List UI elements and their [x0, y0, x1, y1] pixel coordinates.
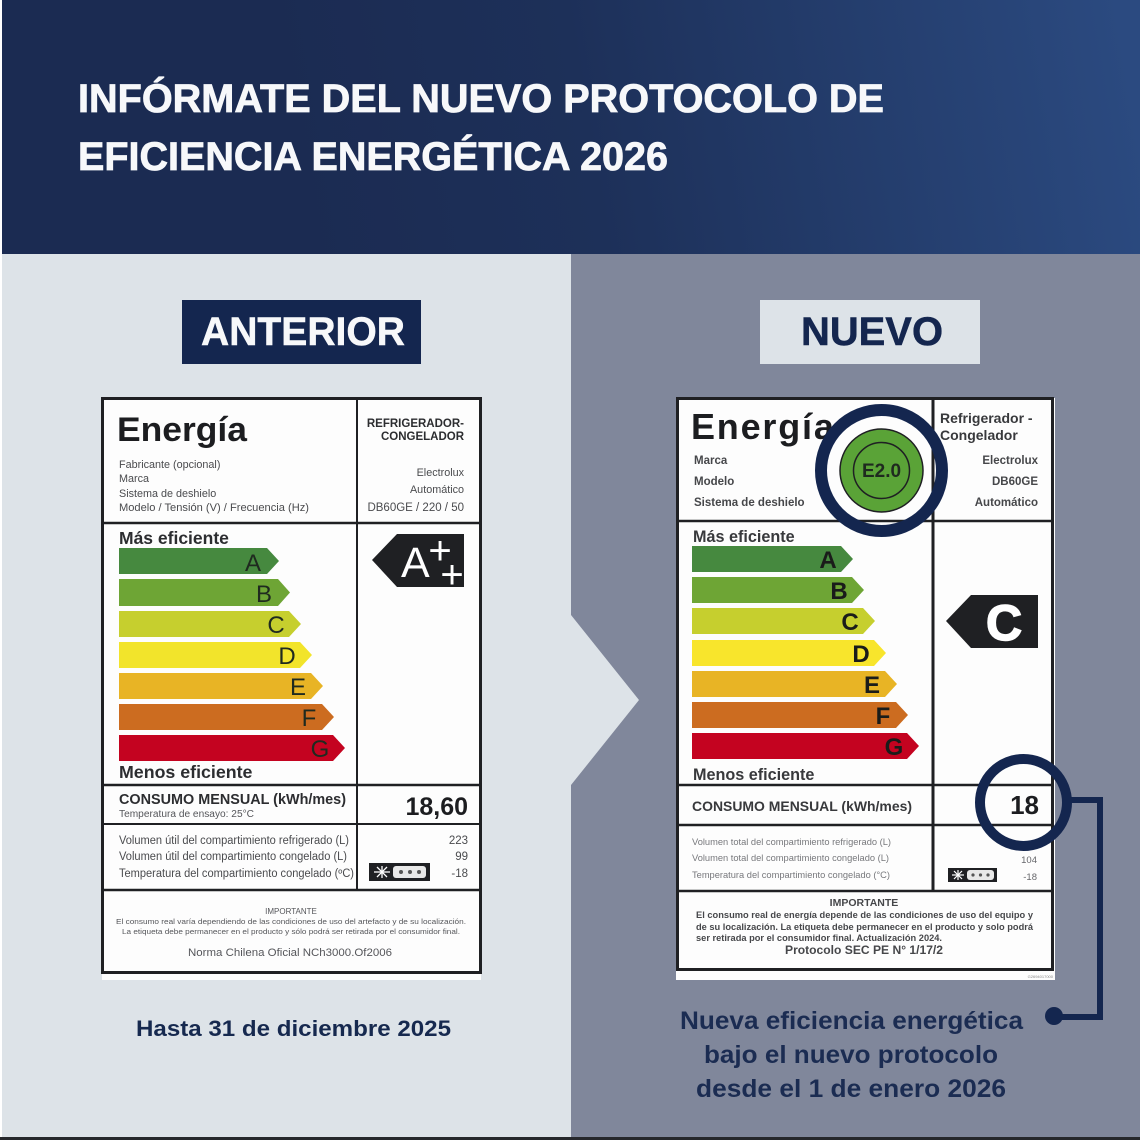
- chart: energy scale nuevo: [692, 546, 919, 761]
- text: volume fields: [119, 835, 354, 880]
- text: volume fields: Volumen total del compartimiento congelado (L): [692, 853, 889, 864]
- text: product values: Electrolux: [417, 467, 465, 479]
- chart: energy scale anterior: B: [256, 581, 272, 608]
- callout: connector line: [1045, 800, 1100, 1025]
- text: volume values: -18: [1023, 872, 1037, 883]
- text: product values: Electrolux: [982, 455, 1039, 467]
- text: importante note: de su localización. La etiqueta debe permanecer en el producto y solo podrá: [696, 922, 1033, 932]
- text: product fields: Marca: [694, 455, 728, 467]
- text: volume fields: Volumen útil del compartimiento congelado (L): [119, 851, 347, 863]
- text: consumo mensual: CONSUMO MENSUAL (kWh/mes): [692, 799, 912, 814]
- panel: nuevo background: [571, 254, 1140, 1137]
- icon: rating A++: [372, 529, 464, 597]
- text: product fields: Modelo / Tensión (V) / Frecuencia (Hz): [119, 502, 309, 514]
- text: volume values: 223: [449, 835, 468, 847]
- text: volume fields: Temperatura del compartimiento congelado (ºC): [119, 868, 354, 880]
- caption: anterior date: Hasta 31 de diciembre 2025: [136, 1016, 451, 1041]
- callout: E2.0 seal: E2.0: [862, 461, 901, 482]
- badge: anterior: [182, 300, 421, 364]
- icon: freezer stars: [369, 863, 430, 881]
- text: product fields: Sistema de deshielo: [694, 497, 805, 509]
- text: product values: DB60GE / 220 / 50: [367, 502, 464, 514]
- header banner: [2, 0, 1140, 254]
- text: product values: Congelador: [940, 427, 1018, 443]
- panel: anterior background: [2, 254, 571, 1137]
- chart: energy scale anterior: F: [302, 705, 316, 732]
- caption: nuevo date: [680, 1007, 1024, 1103]
- text: product values: Automático: [975, 497, 1038, 509]
- icon: rating A++: +: [440, 553, 464, 597]
- icon: freezer stars: [948, 868, 997, 882]
- callout: highlight ring on 18: [980, 759, 1067, 846]
- badge: nuevo: [760, 300, 980, 364]
- badge: anterior: ANTERIOR: [201, 310, 405, 354]
- text: consumo mensual: [119, 792, 346, 820]
- text: importante note: Norma Chilena Oficial NCh3000.Of2006: [188, 947, 392, 959]
- heading: energia: Energía: [691, 406, 836, 447]
- text: mas eficiente: Más eficiente: [693, 528, 795, 546]
- text: product values: [367, 418, 465, 514]
- text: importante note: [116, 907, 466, 959]
- text: label code: G2694017000: [1028, 974, 1054, 979]
- chart: energy scale nuevo: F: [876, 703, 890, 730]
- text: volume values: [449, 835, 468, 880]
- text: volume values: 104: [1021, 855, 1037, 866]
- text: product values: REFRIGERADOR-: [367, 418, 464, 430]
- chart: energy scale nuevo: E: [864, 672, 880, 699]
- panel: etiqueta anterior: [102, 398, 481, 980]
- text: consumo mensual: CONSUMO MENSUAL (kWh/mes): [119, 792, 346, 808]
- text: product values: [940, 410, 1039, 509]
- text: importante note: El consumo real de energía depende de las condiciones de uso del equipo y: [696, 910, 1033, 920]
- text: product fields: Modelo: [694, 476, 734, 488]
- text: menos eficiente: Menos eficiente: [119, 762, 253, 782]
- text: volume fields: Temperatura del compartimiento congelado (°C): [692, 870, 890, 881]
- text: volume fields: Volumen útil del compartimiento refrigerado (L): [119, 835, 349, 847]
- text: volume values: -18: [451, 868, 468, 880]
- text: importante note: Protocolo SEC PE N° 1/17/2: [785, 945, 943, 957]
- text: volume values: 99: [455, 851, 468, 863]
- caption: nuevo date: bajo el nuevo protocolo: [704, 1041, 998, 1069]
- text: product values: CONGELADOR: [381, 431, 465, 443]
- value: consumo 18,60: 18,60: [405, 793, 468, 821]
- icon: rating C: C: [986, 595, 1022, 651]
- text: importante note: IMPORTANTE: [265, 907, 317, 916]
- chart: energy scale nuevo: A: [819, 547, 837, 574]
- chart: energy scale anterior: D: [278, 643, 296, 670]
- icon: rating A++: A: [401, 539, 430, 587]
- chart: energy scale anterior: C: [267, 612, 285, 639]
- text: mas eficiente: Más eficiente: [119, 528, 229, 548]
- text: consumo mensual: Temperatura de ensayo: 25°C: [119, 809, 254, 820]
- text: menos eficiente: Menos eficiente: [693, 766, 814, 784]
- chart: energy scale anterior: G: [311, 736, 329, 763]
- text: importante note: ser retirada por el consumidor final. Actualización 2024.: [696, 933, 942, 943]
- text: product values: DB60GE: [992, 476, 1038, 488]
- chart: energy scale nuevo: B: [830, 578, 848, 605]
- title: INFÓRMATE DEL NUEVO PROTOCOLO DE: [78, 75, 884, 121]
- callout: E2.0 seal: [821, 410, 942, 531]
- chart: energy scale nuevo: D: [852, 641, 870, 668]
- title: [78, 75, 884, 179]
- text: product fields: Marca: [119, 473, 149, 485]
- caption: nuevo date: desde el 1 de enero 2026: [696, 1075, 1006, 1103]
- text: product fields: Fabricante (opcional): [119, 459, 220, 471]
- chart: energy scale anterior: A: [245, 550, 261, 577]
- text: importante note: [696, 897, 1033, 957]
- bottom edge: [0, 1137, 1140, 1140]
- text: volume values: [1021, 855, 1037, 883]
- chart: energy scale anterior: [119, 548, 345, 763]
- text: volume fields: Volumen total del compartimiento refrigerado (L): [692, 837, 891, 848]
- text: product fields: [694, 455, 805, 509]
- chart: energy scale nuevo: G: [885, 734, 903, 761]
- text: volume fields: [692, 837, 891, 881]
- title: EFICIENCIA ENERGÉTICA 2026: [78, 134, 668, 179]
- caption: nuevo date: Nueva eficiencia energética: [680, 1007, 1024, 1035]
- text: importante note: El consumo real varía dependiendo de las condiciones de uso del artefacto y de su localización.: [116, 917, 466, 926]
- text: product fields: Sistema de deshielo: [119, 488, 216, 500]
- arrow: anterior to nuevo: [571, 615, 639, 785]
- heading: energia: Energía: [117, 411, 248, 449]
- badge: nuevo: NUEVO: [801, 310, 943, 354]
- panel: etiqueta nuevo: [676, 398, 1055, 980]
- text: product fields: [119, 459, 309, 514]
- value: consumo 18: 18: [1010, 790, 1039, 820]
- text: importante note: IMPORTANTE: [830, 897, 898, 909]
- text: product values: Refrigerador -: [940, 410, 1033, 426]
- text: importante note: La etiqueta debe permanecer en el producto y sólo podrá ser retirada por el consumidor final.: [122, 927, 460, 936]
- chart: energy scale anterior: E: [290, 674, 306, 701]
- text: product values: Automático: [410, 484, 464, 496]
- chart: energy scale nuevo: C: [841, 609, 859, 636]
- icon: rating C: [946, 595, 1038, 651]
- icon: rating A++: +: [428, 529, 452, 573]
